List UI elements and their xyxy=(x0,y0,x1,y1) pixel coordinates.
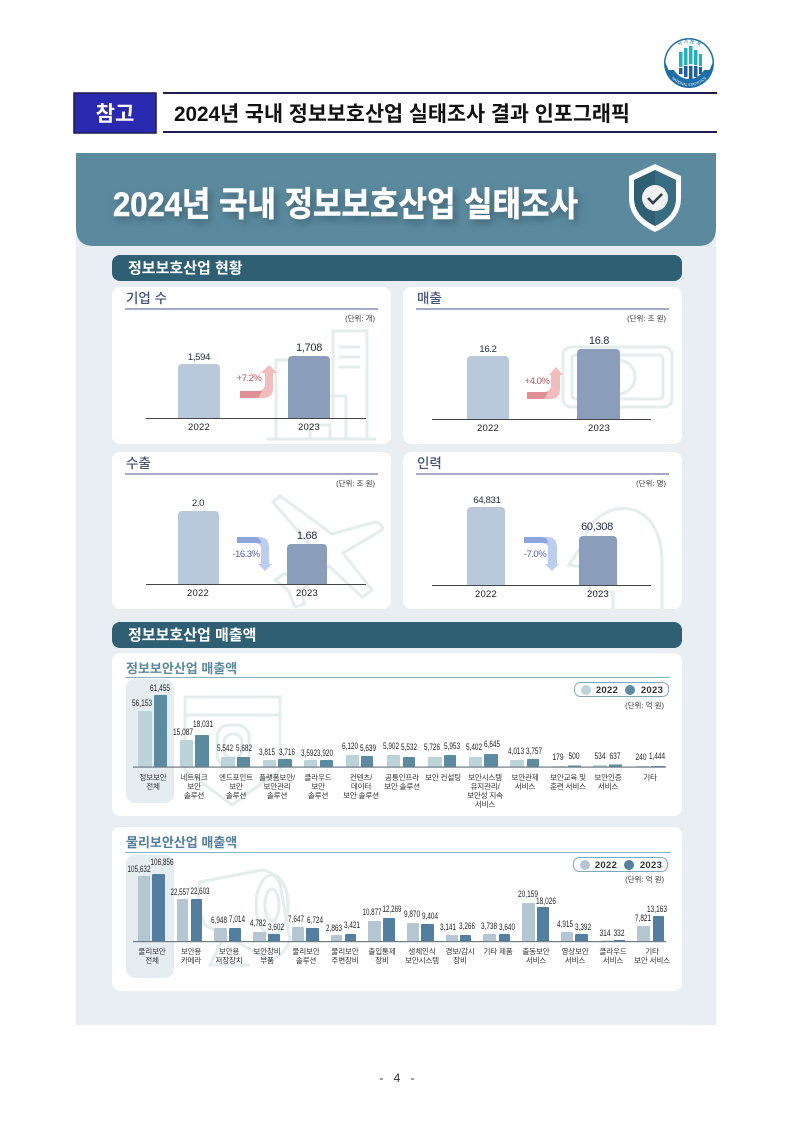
icon: shield with check xyxy=(629,164,681,232)
category labels: 생체인식 xyxy=(408,946,436,956)
legend: 2023 xyxy=(641,685,663,696)
change: +4.0% xyxy=(525,376,550,387)
legend xyxy=(574,682,668,696)
value labels: 9,870 xyxy=(404,909,420,919)
bar 2023 xyxy=(288,356,330,418)
heading: 수출 xyxy=(126,456,151,471)
value labels: 7,014 xyxy=(229,914,245,924)
value labels: 4,915 xyxy=(557,919,573,929)
category labels: 물리보안 xyxy=(331,946,359,956)
category labels: 보안 솔루션 xyxy=(343,790,379,800)
value labels: 18,031 xyxy=(193,719,213,729)
category labels: 보안시스템 xyxy=(405,955,439,965)
panel: 물리보안산업 매출액 xyxy=(112,827,682,991)
category labels: 장비 xyxy=(375,955,389,965)
category labels: 솔루션 xyxy=(296,955,316,965)
value labels: 3,815 xyxy=(259,747,275,757)
value labels: 2,863 xyxy=(326,923,342,933)
heading: 정보보안산업 매출액 xyxy=(126,661,237,676)
value labels: 12,269 xyxy=(382,904,402,914)
value labels: 15,087 xyxy=(173,727,193,737)
watermark: cctv camera xyxy=(198,870,290,965)
value labels: 5,682 xyxy=(236,743,252,753)
panel: 인력 xyxy=(403,452,682,609)
section bar: 정보보호산업 현황 xyxy=(112,255,682,281)
category labels: 플랫폼보안/ xyxy=(259,772,296,782)
value labels: 5,532 xyxy=(401,742,417,752)
logo: national statistics xyxy=(664,38,714,88)
value labels: 4,782 xyxy=(250,918,266,928)
value labels: 22,557 xyxy=(170,887,190,897)
category labels: 주변장비 xyxy=(331,955,359,965)
value labels: 3,738 xyxy=(481,921,497,931)
value 2022: 64,831 xyxy=(473,495,501,506)
value labels: 5,639 xyxy=(360,743,376,753)
bar chart xyxy=(133,874,666,942)
category labels: 영상보안 xyxy=(561,946,589,956)
heading: 인력 xyxy=(417,456,442,471)
heading: 물리보안산업 매출액 xyxy=(126,835,237,850)
value 2022: 2.0 xyxy=(192,498,204,509)
value labels: 56,153 xyxy=(132,698,152,708)
heading: 매출 xyxy=(417,291,442,306)
value labels: 500 xyxy=(568,751,580,761)
category labels: 보안용 xyxy=(181,946,201,956)
category labels: 보안관리 xyxy=(263,781,291,791)
value labels: 105,632 xyxy=(128,864,150,874)
value labels: 3,141 xyxy=(440,922,456,932)
category labels: 솔루션 xyxy=(184,790,204,800)
category labels: 데이터 xyxy=(351,781,371,791)
value labels: 18,026 xyxy=(536,896,556,906)
legend xyxy=(574,858,668,872)
value labels: 10,877 xyxy=(362,907,382,917)
value labels: 61,455 xyxy=(150,683,170,693)
category labels xyxy=(138,946,670,965)
highlight column xyxy=(126,679,174,803)
category labels: 보안 xyxy=(311,781,325,791)
category labels: 기타 xyxy=(645,947,659,956)
arrow up xyxy=(527,367,563,399)
arrow down xyxy=(524,537,559,571)
bar 2023 xyxy=(287,544,327,584)
value labels: 7,821 xyxy=(635,913,651,923)
arrow up xyxy=(240,365,277,398)
background panel xyxy=(76,200,716,1025)
highlight column xyxy=(126,855,174,978)
value 2023: 1,708 xyxy=(296,342,322,354)
value labels: 22,603 xyxy=(190,886,210,896)
watermark: airplane xyxy=(273,496,382,607)
banner title: 2024년 국내 정보보호산업 실태조사 xyxy=(113,186,578,224)
bar 2023 xyxy=(579,536,617,585)
category labels: 보안교육 및 xyxy=(550,772,586,782)
legend: 2023 xyxy=(640,860,662,871)
value labels: 314 xyxy=(600,928,610,938)
category labels: 서비스 xyxy=(565,956,585,965)
category labels: 서비스 xyxy=(526,956,546,965)
unit: (단위: 억 원) xyxy=(625,874,664,884)
value labels: 5,542 xyxy=(217,743,233,753)
category labels: 물리보안 xyxy=(138,946,166,956)
value labels: 3,421 xyxy=(344,920,360,930)
category labels: 기타 xyxy=(643,773,657,782)
value labels: 13,163 xyxy=(647,904,667,914)
value labels: 240 xyxy=(636,752,646,762)
value labels: 7,647 xyxy=(288,914,304,924)
category labels: 정보보안 xyxy=(139,772,167,782)
value 2022: 16.2 xyxy=(479,344,497,355)
category labels: 경보/감시 xyxy=(445,946,475,956)
category labels: 서비스 xyxy=(475,800,495,809)
category labels: 보안시스템 xyxy=(468,772,502,782)
banner xyxy=(76,153,716,246)
year 2023: 2023 xyxy=(298,422,320,433)
value labels: 20,159 xyxy=(518,889,538,899)
category labels: 출입통제 xyxy=(368,946,396,956)
value labels: 3,640 xyxy=(499,922,515,932)
value 2022: 1,594 xyxy=(188,352,210,363)
category labels: 훈련 서비스 xyxy=(550,781,586,791)
category labels: 보안 xyxy=(187,781,201,791)
category labels: 유지관리/ xyxy=(470,781,501,791)
category labels: 보안관제 xyxy=(511,772,539,782)
value labels: 5,726 xyxy=(424,742,440,752)
value labels: 6,120 xyxy=(342,741,358,751)
category labels: 기타 제품 xyxy=(483,947,513,956)
bar 2022 xyxy=(178,364,220,418)
category labels: 카메라 xyxy=(181,956,201,965)
year 2023: 2023 xyxy=(587,589,609,600)
change: -7.0% xyxy=(524,549,547,560)
value labels: 3,592 xyxy=(301,748,317,758)
value labels: 9,404 xyxy=(422,911,438,921)
value labels xyxy=(132,683,665,762)
category labels: 전체 xyxy=(145,955,159,965)
value 2023: 60,308 xyxy=(581,521,613,533)
category labels: 클라우드 xyxy=(599,947,627,956)
category labels: 저장장치 xyxy=(215,955,243,965)
change: -16.3% xyxy=(232,549,261,560)
logo: national statistics: 국 가 통 계 xyxy=(678,40,701,46)
section bar: 정보보호산업 현황: 정보보호산업 현황 xyxy=(128,260,243,277)
category labels: 보안 xyxy=(229,781,243,791)
category labels: 네트워크 xyxy=(180,773,208,782)
header title: 2024년 국내 정보보호산업 실태조사 결과 인포그래픽 xyxy=(174,103,630,126)
category labels: 서비스 xyxy=(598,782,618,791)
value 2023: 1.68 xyxy=(297,530,317,542)
category labels: 보안 솔루션 xyxy=(384,781,420,791)
value labels: 332 xyxy=(614,928,624,938)
unit: (단위: 억 원) xyxy=(625,700,664,710)
category labels: 솔루션 xyxy=(226,790,246,800)
value labels: 6,948 xyxy=(211,915,227,925)
category labels xyxy=(139,772,657,809)
category labels: 공통인프라 xyxy=(385,772,419,782)
unit: (단위: 명) xyxy=(636,478,666,488)
change: +7.2% xyxy=(237,373,262,384)
year 2022: 2022 xyxy=(477,423,499,434)
category labels: 보안인증 xyxy=(594,772,622,782)
value labels: 534 xyxy=(594,751,606,761)
value labels: 6,645 xyxy=(484,739,500,749)
arrow down xyxy=(237,537,272,571)
watermark: head xyxy=(569,508,662,609)
value labels: 3,392 xyxy=(575,922,591,932)
category labels: 클라우드 xyxy=(304,773,332,782)
value labels: 637 xyxy=(610,751,620,761)
header tag: 참고 xyxy=(74,93,156,133)
year 2022: 2022 xyxy=(187,588,209,599)
category labels: 출동보안 xyxy=(522,946,550,956)
category labels: 서비스 xyxy=(515,782,535,791)
category labels: 보안 컨설팅 xyxy=(425,772,461,782)
year 2023: 2023 xyxy=(296,588,318,599)
watermark: building xyxy=(267,331,376,439)
category labels: 엔드포인트 xyxy=(219,772,253,782)
category labels: 보안장비 xyxy=(253,946,281,956)
value labels: 3,920 xyxy=(317,748,333,758)
watermark: banknote xyxy=(563,347,672,407)
heading: 기업 수 xyxy=(126,291,167,306)
value labels: 1,444 xyxy=(649,751,665,761)
category labels: 서비스 xyxy=(603,956,623,965)
header tag: 참고: 참고 xyxy=(96,103,134,126)
panel: 기업 수 xyxy=(112,287,391,444)
page number: - 4 - xyxy=(379,1071,415,1085)
bar 2023 xyxy=(577,349,620,419)
watermark: shield lock xyxy=(185,697,280,805)
category labels: 부품 xyxy=(260,956,274,965)
value labels: 5,902 xyxy=(383,741,399,751)
category labels: 전체 xyxy=(146,781,160,791)
section bar: 정보보호산업 매출액 xyxy=(112,622,682,648)
value labels: 6,724 xyxy=(307,915,323,925)
value labels: 3,266 xyxy=(459,921,475,931)
panel: 매출 xyxy=(403,287,682,444)
year 2022: 2022 xyxy=(188,422,210,433)
value labels: 5,953 xyxy=(444,741,460,751)
category labels: 보안 서비스 xyxy=(634,955,670,965)
year 2022: 2022 xyxy=(475,589,497,600)
panel: 정보보안산업 매출액 xyxy=(112,653,682,816)
value labels: 106,856 xyxy=(150,857,174,867)
value labels: 3,602 xyxy=(268,922,284,932)
category labels: 솔루션 xyxy=(308,790,328,800)
unit: (단위: 조 원) xyxy=(336,478,375,488)
unit: (단위: 개) xyxy=(345,313,375,323)
bar 2022 xyxy=(178,511,219,584)
category labels: 솔루션 xyxy=(267,790,287,800)
value labels: 4,013 xyxy=(508,746,524,756)
value labels: 5,402 xyxy=(466,742,482,752)
value labels: 3,716 xyxy=(279,747,295,757)
logo: national statistics: NATIONAL STATISTICS xyxy=(672,76,706,86)
bar 2022 xyxy=(467,507,505,585)
section bar: 정보보호산업 매출액: 정보보호산업 매출액 xyxy=(128,627,256,644)
category labels: 컨텐츠/ xyxy=(350,772,373,782)
legend: 2022 xyxy=(596,685,618,696)
value labels: 179 xyxy=(552,752,564,762)
unit: (단위: 조 원) xyxy=(627,313,666,323)
category labels: 보안용 xyxy=(219,946,239,956)
category labels: 장비 xyxy=(453,955,467,965)
bar 2022 xyxy=(467,356,509,419)
bar chart xyxy=(133,695,666,768)
value labels: 3,757 xyxy=(526,746,542,756)
year 2023: 2023 xyxy=(588,423,610,434)
value labels xyxy=(128,857,667,938)
panel: 수출 xyxy=(112,452,391,609)
value 2023: 16.8 xyxy=(589,335,609,347)
category labels: 물리보안 xyxy=(292,946,320,956)
legend: 2022 xyxy=(595,860,617,871)
category labels: 보안성 지속 xyxy=(467,790,503,800)
